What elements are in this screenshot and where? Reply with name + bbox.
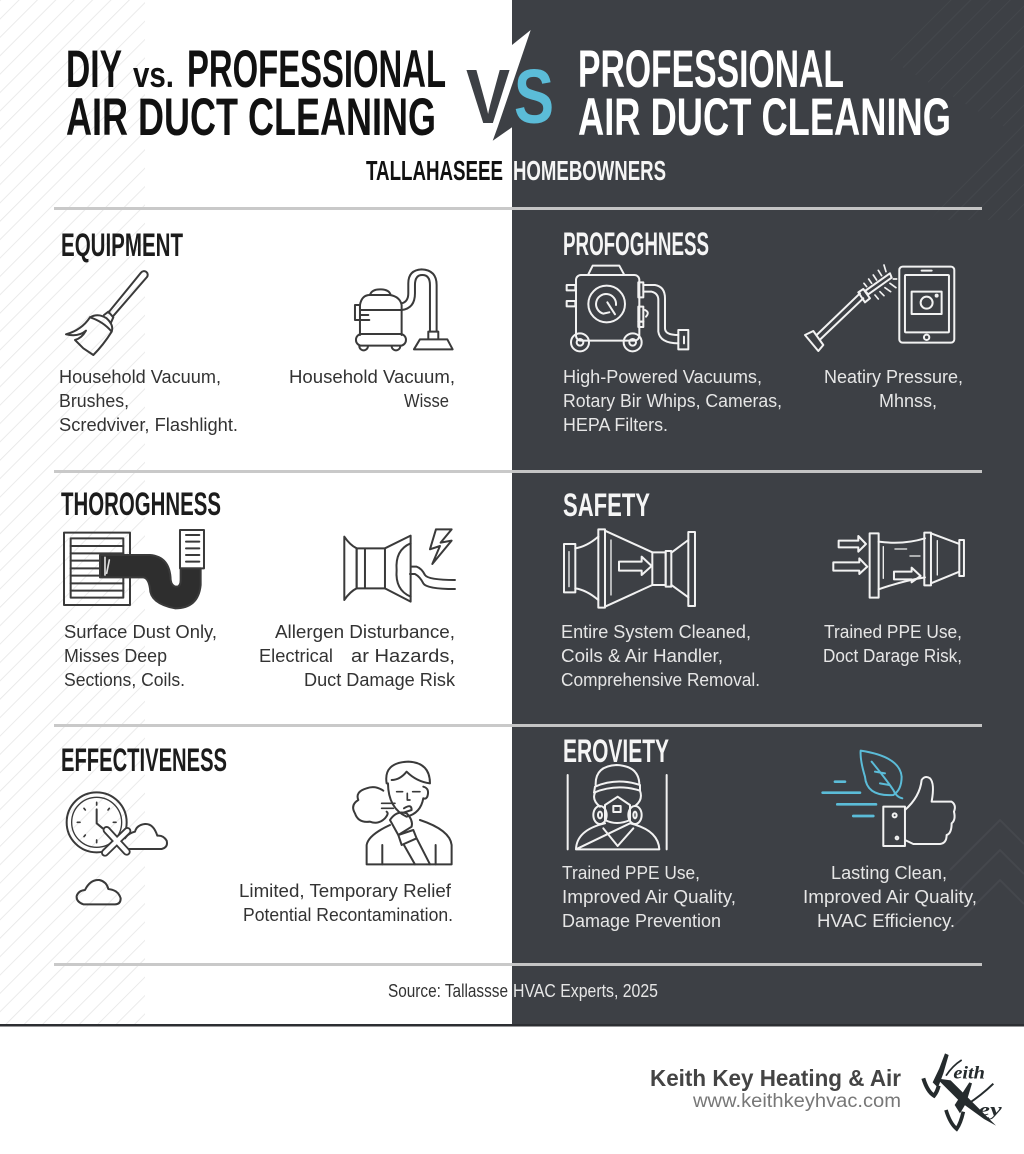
title: right (578, 40, 951, 147)
panel: DIY thoroughness (61, 486, 456, 690)
subtitle (366, 155, 666, 186)
VS badge with lightning slash: V (466, 54, 510, 140)
text: DIY vacuum: Household Vacuum, (289, 366, 455, 387)
text: pro tools: High-Powered Vacuums, (563, 366, 762, 387)
text: allergen hazards (259, 621, 456, 690)
text: surface dust: Sections, Coils. (64, 669, 185, 690)
text: DIY tools: Brushes, (59, 390, 129, 411)
text: entire system: Comprehensive Removal. (561, 669, 760, 690)
text: limited relief: Potential Recontamination. (243, 904, 453, 925)
text: surface dust: Surface Dust Only, (64, 621, 217, 642)
icon: horn with electrical bolt (344, 529, 455, 602)
text: entire system: Entire System Cleaned, (561, 621, 751, 642)
icon: thumbs up with leaf (823, 751, 955, 846)
source line: HVAC Experts, 2025 (513, 981, 658, 1001)
panel: dark professional side (512, 0, 1024, 1024)
heading: safety: SAFETY (563, 487, 650, 523)
text: entire system: Coils & Air Handler, (561, 645, 723, 666)
text: pro pressure (824, 366, 963, 411)
icon: duct with arrow (564, 529, 695, 608)
text: limited relief (239, 880, 453, 925)
icon: vent with dark duct (64, 530, 204, 608)
subtitle: TALLAHASEEE (366, 155, 503, 186)
text: DIY tools: Scredviver, Flashlight. (59, 414, 238, 435)
text: trained PPE (823, 621, 962, 666)
title: left: DIY (66, 40, 122, 99)
heading: profoghness: PROFOGHNESS (563, 226, 709, 262)
heading: thoroghness: THOROGHNESS (61, 486, 221, 522)
icon: technician in respirator (568, 765, 667, 849)
icon: high-powered machine (567, 266, 688, 351)
text: lasting clean: Lasting Clean, (831, 862, 947, 883)
text: surface dust: Misses Deep (64, 645, 167, 666)
title: left: AIR DUCT CLEANING (66, 88, 436, 147)
icon: clock with X and clouds (67, 792, 167, 904)
text: PPE and air quality: Improved Air Quality, (562, 886, 736, 907)
icon: rotary brush and camera tablet (805, 265, 954, 351)
panel: DIY equipment (59, 227, 455, 435)
icon: household vacuum (355, 269, 453, 350)
text: DIY tools: Household Vacuum, (59, 366, 221, 387)
source line (388, 981, 658, 1001)
text: trained PPE: Trained PPE Use, (824, 621, 962, 642)
footer brand text: Keith Key Heating & Air (650, 1065, 901, 1091)
text: pro tools: Rotary Bir Whips, Cameras, (563, 390, 782, 411)
title: left: PROFESSIONAL (187, 40, 446, 99)
text: limited relief: Limited, Temporary Relief (239, 880, 452, 901)
VS badge with lightning slash: S (514, 54, 554, 140)
text: lasting clean (803, 862, 977, 931)
footer logo: eith (953, 1062, 985, 1082)
text: lasting clean: Improved Air Quality, (803, 886, 977, 907)
heading: effectiveness: EFFECTIVENESS (61, 742, 227, 778)
text: PPE and air quality: Damage Prevention (562, 910, 721, 931)
text: allergen hazards: Allergen Disturbance, (275, 621, 455, 642)
icon: duct with airflow arrows (833, 533, 964, 598)
footer brand text (650, 1065, 901, 1112)
footer logo (923, 1053, 1003, 1129)
panel: professional equipment (563, 226, 963, 435)
icon: broom (66, 271, 148, 355)
panel: DIY effectiveness (61, 742, 453, 925)
text: PPE and air quality (562, 862, 736, 931)
icon: coughing person (353, 762, 452, 864)
text: trained PPE: Doct Darage Risk, (823, 645, 962, 666)
footer logo: ey (978, 1100, 1003, 1120)
heading: equipment: EQUIPMENT (61, 227, 183, 263)
subtitle: HOMEBOWNERS (513, 155, 666, 186)
text: pro tools: HEPA Filters. (563, 414, 668, 435)
text: pro tools (563, 366, 782, 435)
text: DIY vacuum (289, 366, 455, 411)
text: allergen hazards: Duct Damage Risk (304, 669, 456, 690)
text: surface dust (64, 621, 217, 690)
VS badge with lightning slash (466, 30, 554, 141)
source line: Source: Tallassse (388, 981, 508, 1001)
text: DIY tools (59, 366, 238, 435)
heading: eroviety: EROVIETY (563, 733, 669, 769)
text: entire system (561, 621, 760, 690)
text: pro pressure: Mhnss, (879, 390, 937, 411)
panel: professional safety (561, 487, 964, 690)
text: PPE and air quality: Trained PPE Use, (562, 862, 700, 883)
footer brand text: www.keithkeyhvac.com (692, 1091, 901, 1112)
text: allergen hazards: Electrical (259, 645, 333, 666)
title: left (66, 40, 446, 147)
text: pro pressure: Neatiry Pressure, (824, 366, 963, 387)
text: lasting clean: HVAC Efficiency. (817, 910, 955, 931)
text: allergen hazards: ar Hazards, (351, 645, 455, 666)
panel: professional results (562, 733, 977, 931)
title: left: vs. (133, 54, 174, 95)
text: DIY vacuum: Wisse (404, 390, 449, 411)
title: right: PROFESSIONAL (578, 40, 844, 99)
